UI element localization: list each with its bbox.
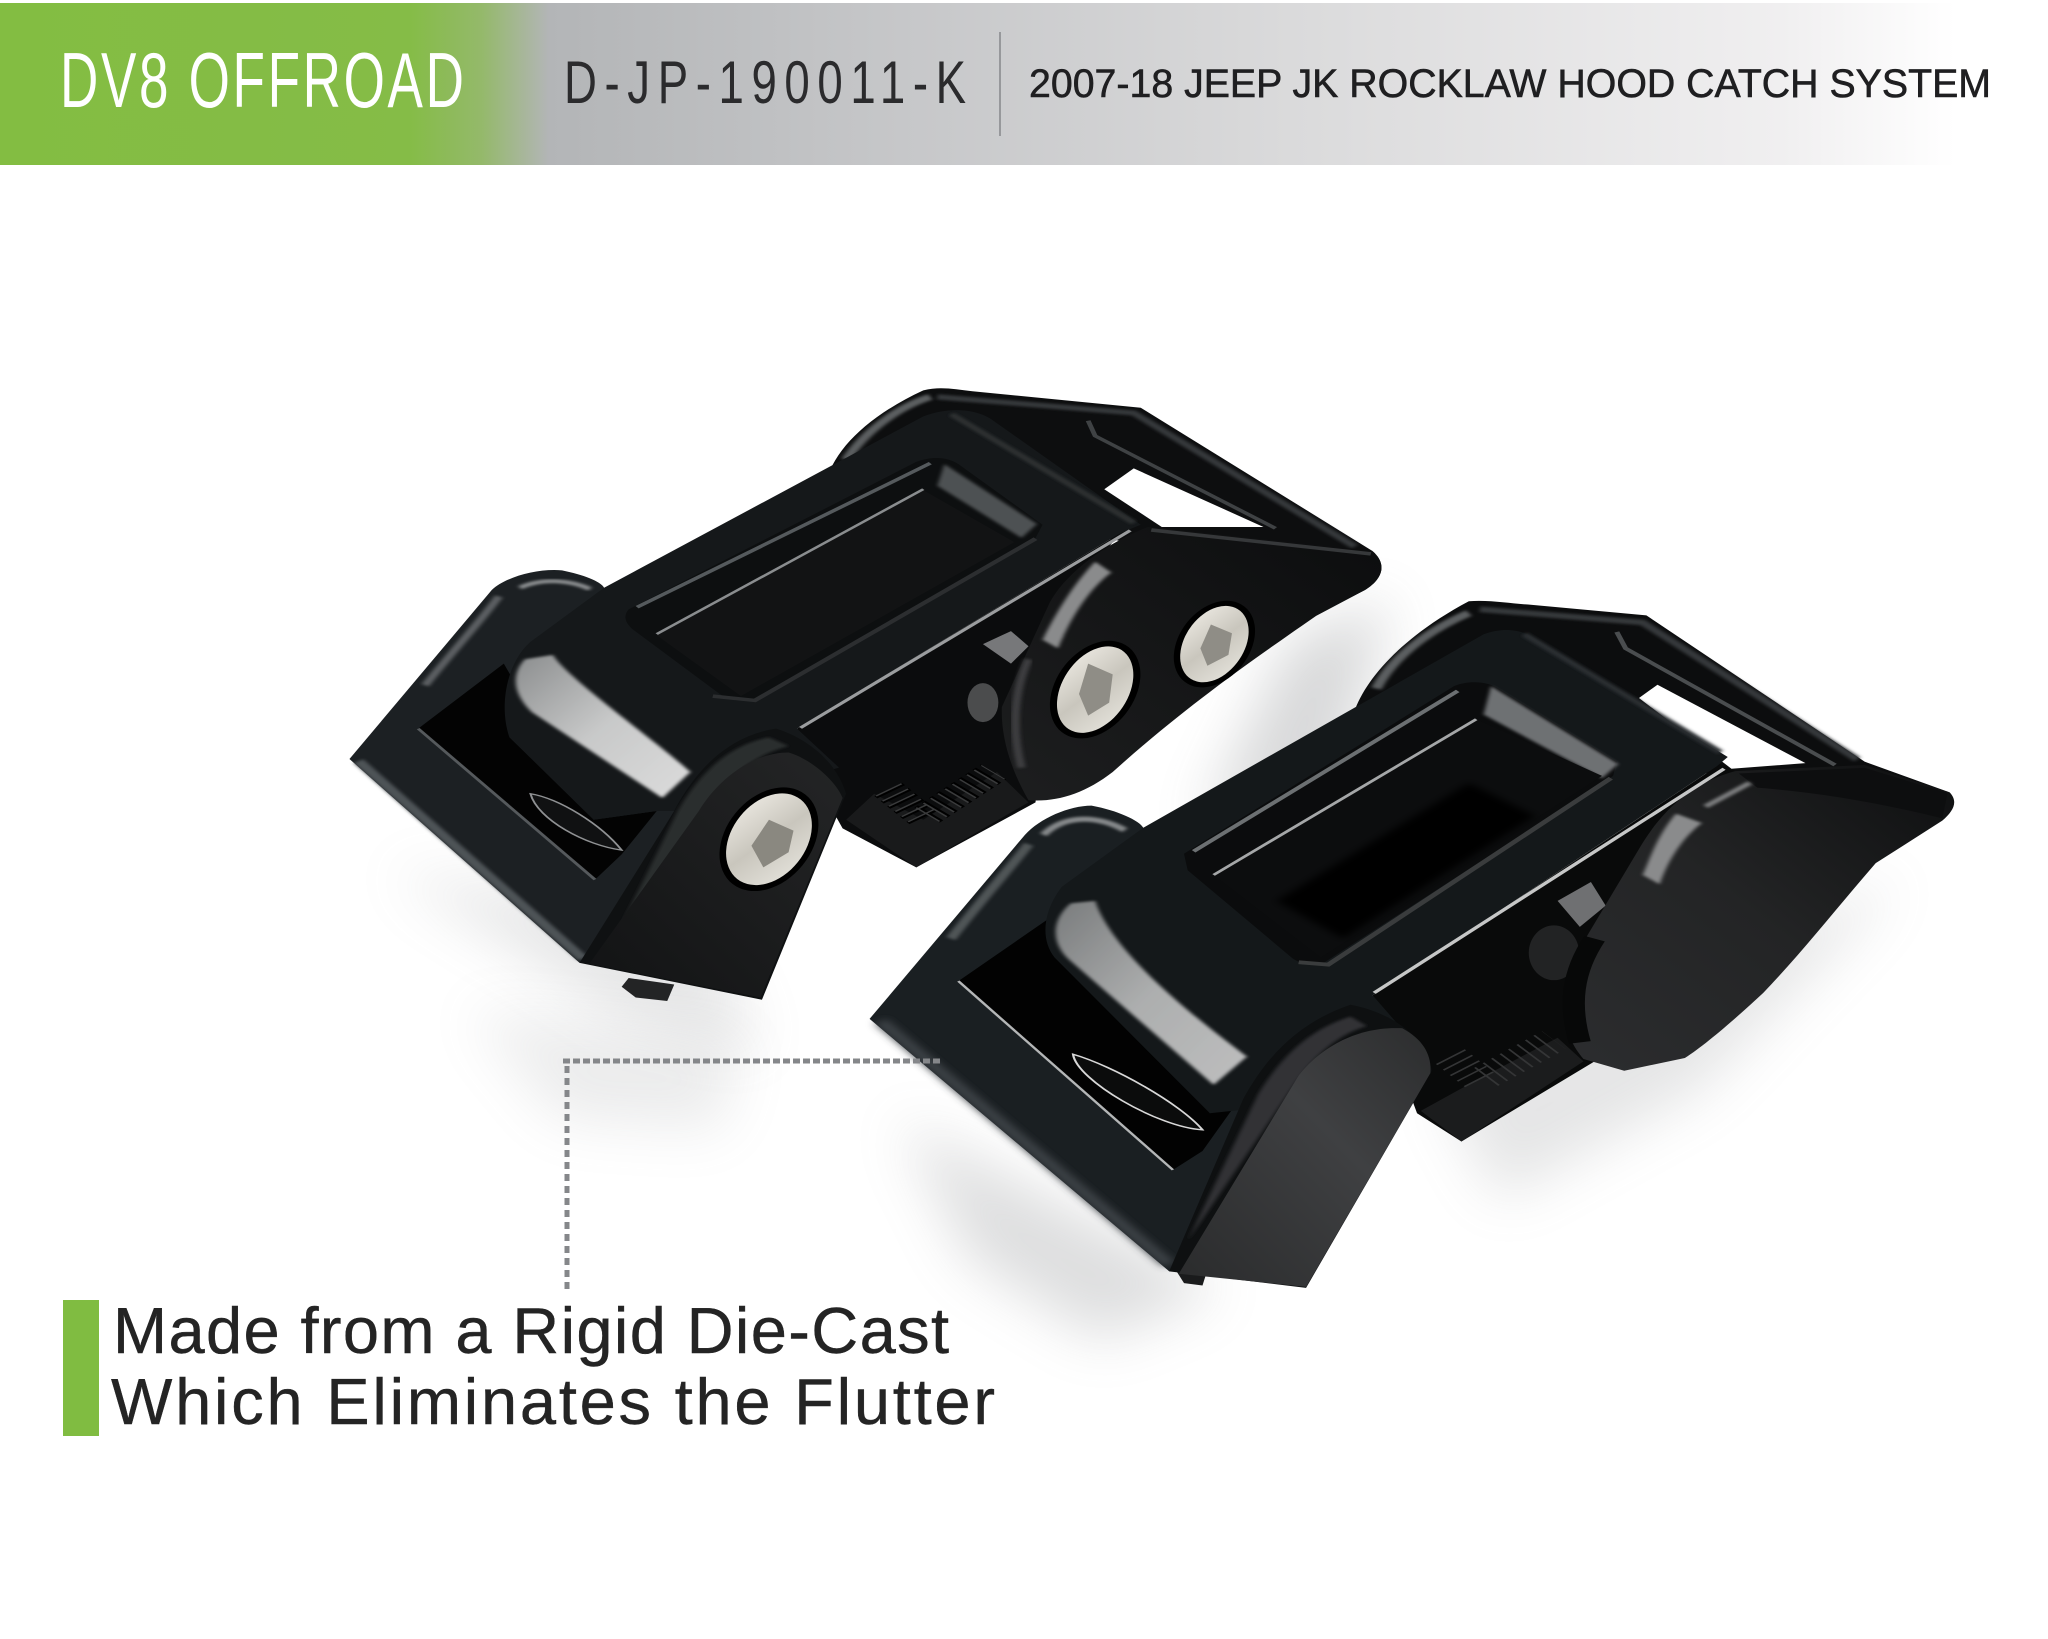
rear frame <box>825 388 1382 629</box>
handle <box>505 410 1141 820</box>
brand name: DV8 OFFROAD <box>60 38 464 125</box>
front ear with bolt <box>580 729 846 1000</box>
floor shadows <box>390 600 1900 1340</box>
left bracket base <box>349 570 811 963</box>
right handle <box>1045 630 1728 1113</box>
callout accent bar <box>63 1300 99 1436</box>
pin <box>622 978 674 1001</box>
header divider <box>999 32 1001 136</box>
right hood catch <box>870 601 1954 1288</box>
right side plate <box>1563 765 1954 1071</box>
part number: D-JP-190011-K <box>564 50 966 117</box>
right pin <box>1177 1271 1206 1285</box>
left hood catch <box>349 388 1382 1001</box>
side plate with bolts <box>1002 527 1382 801</box>
callout text: Made from a Rigid Die-Cast <box>113 1294 949 1367</box>
right rear frame <box>1354 601 1950 792</box>
callout text: Which Eliminates the Flutter <box>111 1365 995 1438</box>
right bracket base <box>870 806 1358 1271</box>
latch mechanism <box>797 533 1120 867</box>
dotted leader line <box>563 1061 940 1294</box>
header band <box>0 3 2048 165</box>
product title: 2007-18 JEEP JK ROCKLAW HOOD CATCH SYSTEM <box>1029 62 1991 106</box>
callout text <box>111 1294 995 1438</box>
right front ear <box>1169 1005 1432 1288</box>
callout <box>63 1294 995 1438</box>
right latch mechanism <box>1373 764 1750 1142</box>
